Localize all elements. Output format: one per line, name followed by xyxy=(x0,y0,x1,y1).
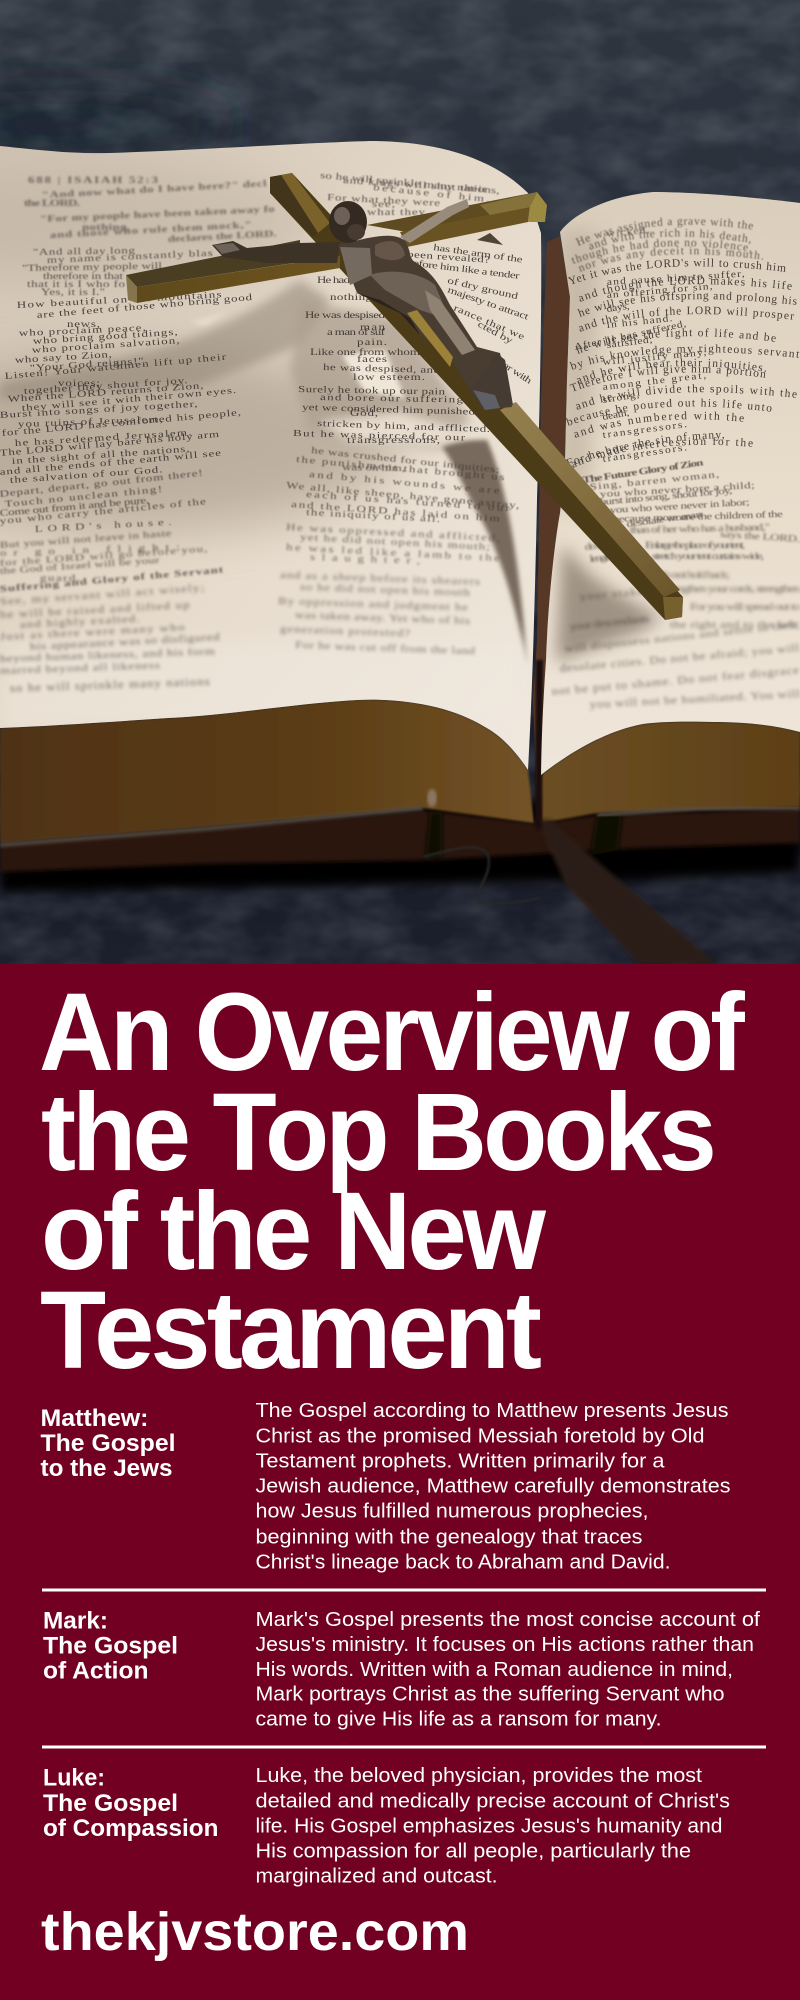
printed scripture text: left page, left column: so he will sprinkle many nations xyxy=(10,675,210,695)
printed scripture text: left page, left column: are the feet of those who bring good xyxy=(36,292,253,320)
printed scripture text: left page, left column: who say to Zion, xyxy=(15,350,112,365)
printed scripture text: left page, left column: who bring good tidings, xyxy=(33,327,178,346)
printed scripture text: left page, left column: that it is I who fo xyxy=(27,280,125,289)
printed scripture text: left page, right column: before him like a tender xyxy=(407,258,520,281)
printed scripture text: right page: among the great, xyxy=(602,370,707,393)
printed scripture text: left page, right column: He was oppressed and afflicted, xyxy=(286,522,500,544)
body text: Mark: Mark portrays Christ as the suffering Servant who xyxy=(256,1682,724,1706)
printed scripture text: left page, right column: yet he did not open his mouth; xyxy=(300,532,490,552)
printed scripture text: left page, right column: and as a sheep before its shearers xyxy=(280,569,481,588)
printed scripture text: right page: will dispossess nations and settle in their xyxy=(564,619,799,655)
body text: Matthew: Christ's lineage back to Abraham and David. xyxy=(256,1550,670,1574)
body text: Matthew xyxy=(256,1399,730,1574)
printed scripture text: left page, left column: and highly exalted. xyxy=(20,613,140,631)
printed scripture text: left page, right column: majesty to attract xyxy=(446,285,531,322)
printed scripture text: left page, left column: or go in flight; xyxy=(0,542,180,558)
body text: Mark: Jesus's ministry. It focuses on His actions rather than xyxy=(256,1633,754,1656)
printed scripture text: right page: For he bore the sin of many, xyxy=(566,432,724,464)
feet block xyxy=(470,353,513,410)
printed scripture text: left page, left column: beyond human likeness, and his form xyxy=(0,646,215,665)
printed scripture text: left page, right column: of dry ground xyxy=(446,276,519,302)
printed scripture text: left page, right column: God, xyxy=(350,409,378,418)
printed scripture text: right page: transgressors. xyxy=(602,442,688,465)
printed scripture text: right page: and he will divide the spoils with the xyxy=(576,384,797,410)
printed scripture text: left page, right column: low esteem. xyxy=(353,373,425,382)
printed scripture text: left page, left column: news, xyxy=(67,320,100,329)
printed scripture text: right page: will justify many, xyxy=(602,347,707,368)
printed scripture text: left page, right column: was on him, xyxy=(342,463,405,474)
gold gap between legs and beam xyxy=(407,310,453,367)
printed scripture text: left page, left column: "And all day long xyxy=(33,246,135,257)
printed scripture text: right page: The Future Glory of Zion xyxy=(582,458,705,485)
body text: Luke: life. His Gospel emphasizes Jesus's humanity and xyxy=(256,1814,722,1838)
printed scripture text: left page, left column: "Therefore my people will xyxy=(22,261,162,273)
printed scripture text: left page, right column: because of him. xyxy=(373,183,490,205)
printed scripture text: right page: your stakes xyxy=(579,585,650,603)
printed scripture text: left page, right column: the punishment that brought us xyxy=(296,455,505,483)
printed scripture text: right page: do not hold xyxy=(584,538,630,553)
printed scripture text: right page: he will see his offspring and prolong his xyxy=(577,292,796,317)
printed scripture text: right page xyxy=(550,217,800,712)
printed scripture text: left page, right column: so he did not open his mouth xyxy=(300,581,470,599)
section: Matthew xyxy=(40,1399,730,1574)
printed scripture text: left page, left column: in the sight of all the nations, xyxy=(11,444,190,466)
printed scripture text: left page, right column: jar with xyxy=(498,358,534,386)
body text: Mark xyxy=(256,1608,760,1730)
printed scripture text: left page, right column: He had xyxy=(317,276,350,285)
panel: maroon content background xyxy=(0,964,800,2000)
printed scripture text: left page, left column: Listen! Your watchmen lift up their xyxy=(4,352,227,381)
printed scripture text: right page: transgressors. xyxy=(602,419,688,441)
heading: Luke xyxy=(43,1764,218,1842)
printed scripture text: left page, right column: pain. xyxy=(357,338,387,347)
printed scripture text: left page, left column xyxy=(0,176,277,695)
printed scripture text: left page, left column: voices; xyxy=(58,379,100,388)
title: An Overview of xyxy=(39,971,745,1094)
printed scripture text: right page: and with the rich in his death, xyxy=(588,228,751,250)
printed scripture text: right page: you will not be humiliated. You will xyxy=(589,687,800,711)
photo: open Bible with crucifix xyxy=(0,0,800,964)
title: of the New xyxy=(41,1170,546,1293)
printed scripture text: left page, right column: he was led like a lamb to the xyxy=(286,542,500,564)
printed scripture text: left page, left column: marred beyond all likeness xyxy=(0,660,160,677)
left page xyxy=(0,141,541,770)
printed scripture text: left page, right column: nothing xyxy=(330,293,372,302)
body text: Matthew: how Jesus fulfilled numerous prophecies, xyxy=(256,1500,648,1522)
body text: Mark: Mark's Gospel presents the most concise account of xyxy=(256,1608,760,1631)
printed scripture text: right page: lengthen your xyxy=(589,549,640,565)
printed scripture text: left page, right column: For what they were xyxy=(327,193,440,208)
printed scripture text: right page: because he poured out his life unto xyxy=(566,398,772,426)
printed scripture text: left page, left column: Burst into songs of joy together, xyxy=(0,399,198,420)
printed scripture text: right page: than of her who has a husband," xyxy=(630,522,770,536)
printed scripture text: right page: and he will bear their iniquities. xyxy=(577,358,766,384)
printed scripture text: right page: Enlarge the place of your tent, xyxy=(645,540,745,551)
printed scripture text: left page, right column: and kings will shut their xyxy=(343,176,487,195)
body text: Luke: detailed and medically precise account of Christ's xyxy=(256,1790,730,1812)
heading: Matthew: The Gospel xyxy=(40,1430,176,1457)
head xyxy=(329,201,367,243)
printed scripture text: left page, right column: He was despised xyxy=(305,311,385,320)
body text: Mark: came to give His life as a ransom for many. xyxy=(256,1708,662,1730)
printed scripture text: right page: desolate woman xyxy=(626,510,703,529)
printed scripture text: left page, left column: When the LORD returns to Zion, xyxy=(7,381,204,404)
printed scripture text: right page: desolate cities. Do not be afraid; you will xyxy=(559,641,800,675)
body xyxy=(338,236,512,410)
figure of Christ xyxy=(212,199,513,410)
printed scripture text: left page, left column: for the LORD will go before you, xyxy=(0,544,208,568)
printed scripture text: right page: and cause him to suffer, xyxy=(606,268,745,288)
printed scripture text: left page, right column: been revealed? xyxy=(407,250,490,265)
heading: Mark: The Gospel xyxy=(43,1632,178,1660)
cross: vertical beam xyxy=(270,173,683,620)
body text: Luke: His compassion for all people, particularly the xyxy=(256,1840,691,1862)
printed scripture text: left page, left column: 688 | ISAIAH 52:3 xyxy=(28,176,158,185)
printed scripture text: left page, right column: so he will sprinkle many nations, xyxy=(320,171,500,196)
footer website: thekjvstore.com xyxy=(41,1902,469,1962)
printed scripture text: left page, left column: Come out from it and be pure, xyxy=(0,496,150,518)
body text: Luke xyxy=(256,1764,730,1888)
cross shadow wedge on page xyxy=(477,233,503,245)
printed scripture text: right page: and though the LORD makes his life xyxy=(579,276,792,302)
printed scripture text: right page: you who never bore a child; xyxy=(600,481,755,499)
printed scripture text: left page, right column: generation protested? xyxy=(280,623,410,639)
printed scripture text: left page, left column: who proclaim peace, xyxy=(19,323,146,338)
printed scripture text: left page, right column: what they xyxy=(367,208,425,217)
printed scripture text: left page, right column: For he was cut off from the land xyxy=(295,639,475,657)
printed scripture text: right page: and made intercession for the xyxy=(572,437,753,468)
printed scripture text: left page, left column: he has redeemed Jerusalem. xyxy=(15,428,192,448)
printed scripture text: left page, right column: and the LORD has laid on him xyxy=(291,500,500,524)
printed scripture text: left page, right column: We all, like sheep, have gone astray, xyxy=(286,481,520,511)
section: Luke xyxy=(43,1764,730,1888)
printed scripture text: left page, right column: But he was pierced for our xyxy=(293,429,465,443)
printed scripture text: right page: not be put to shame. Do not fear disgrace xyxy=(551,663,799,698)
section: Mark xyxy=(43,1608,760,1730)
printed scripture text: right page: by his knowledge my righteous servant xyxy=(569,344,800,370)
printed scripture text: right page: satisfied; xyxy=(606,334,653,351)
body text: Luke: marginalized and outcast. xyxy=(256,1864,498,1888)
printed scripture text: left page, right column: each of us has turned to our xyxy=(306,490,510,514)
printed scripture text: left page, right column: stricken by him, and afflicted. xyxy=(317,419,490,435)
printed scripture text: left page, left column: therefore in that xyxy=(43,272,124,281)
heading: Matthew: to the Jews xyxy=(40,1455,172,1482)
heading: Luke: Luke: xyxy=(43,1764,105,1792)
printed scripture text: left page, left column: they will see it with their own eyes. xyxy=(21,386,237,413)
printed scripture text: left page, left column: together they shout for joy. xyxy=(24,376,188,396)
printed scripture text: right page: he will see the light of life and be xyxy=(575,328,776,354)
printed scripture text: right page: lengthen your cords, strengthen xyxy=(670,583,800,595)
printed scripture text: right page: Yet it was the LORD's will to crush him xyxy=(568,258,786,284)
heading: Luke: of Compassion xyxy=(43,1815,218,1842)
printed scripture text: right page: Sing, barren woman, xyxy=(589,470,720,492)
body text: Matthew: Christ as the promised Messiah foretold by Old xyxy=(256,1424,704,1448)
body text: Mark: His words. Written with a Roman audience in mind, xyxy=(256,1658,733,1681)
heading: Mark: of Action xyxy=(43,1658,148,1684)
heading: Mark xyxy=(43,1608,178,1684)
printed scripture text: right page: stretch your tent curtains wide, xyxy=(652,551,764,562)
body text: Luke: Luke, the beloved physician, provides the most xyxy=(256,1764,702,1787)
printed scripture text: left page, left column: his appearance was so disfigured xyxy=(30,631,220,653)
printed scripture text: left page, left column: my name is constantly blas xyxy=(47,248,213,265)
printed scripture text: right page: For you will spread out to xyxy=(690,601,800,613)
printed scripture text: right page: though he had done no violence, xyxy=(571,238,752,264)
heading: Mark: Mark: xyxy=(43,1608,108,1634)
title: the Top Books xyxy=(41,1071,713,1194)
printed scripture text: right page: death, xyxy=(602,407,630,423)
printed scripture text: right page: an offering for sin, xyxy=(606,281,713,301)
printed scripture text: left page, right column: rance that we xyxy=(452,303,526,342)
page block: gilded edges xyxy=(0,700,800,845)
printed scripture text: left page, right column: the iniquity of us all. xyxy=(306,508,440,524)
printed scripture text: left page, right column: was taken away. Yet who of his xyxy=(295,609,471,627)
printed scripture text: left page, left column: the salvation of our God. xyxy=(9,465,163,485)
printed scripture text: left page, left column: you who carry the articles of the xyxy=(0,497,206,526)
printed scripture text: left page, right column: slaughter, xyxy=(310,552,420,566)
printed scripture text: right page: Therefore I will give him a portion xyxy=(570,364,766,392)
heading: Matthew: Matthew: xyxy=(40,1405,148,1432)
printed scripture text: left page, left column: you ruins of Jerusalem, xyxy=(18,415,163,429)
printed scripture text: left page, left column: Yes, it is I." xyxy=(41,288,105,297)
printed scripture text: left page, left column: See, my servant will act wisely; xyxy=(0,582,205,608)
printed scripture text: right page: wicked, xyxy=(606,224,650,240)
left arm and hand xyxy=(212,241,340,263)
printed scripture text: left page, right column: has the arm of the xyxy=(433,243,523,265)
printed scripture text: right page: the right and to the left; xyxy=(670,619,800,631)
printed scripture text: left page, right column: yet we considered him punished xyxy=(302,403,476,417)
printed scripture text: left page, right column: Surely he took up our pain xyxy=(298,385,446,397)
printed scripture text: right page: in his hand. xyxy=(606,313,673,331)
printed scripture text: left page, left column: Just as there were many who xyxy=(0,621,185,643)
printed scripture text: left page, left column: How beautiful on the mountains xyxy=(17,290,222,310)
printed scripture text: right page: nor was any deceit in his mouth. xyxy=(578,246,764,272)
heading: Luke: The Gospel xyxy=(43,1790,178,1817)
printed scripture text: left page, left column: LORD's house. xyxy=(35,517,172,534)
printed scripture text: left page, left column: the LORD. xyxy=(24,199,80,208)
printed scripture text: left page, left column: But you will not leave in haste xyxy=(0,529,172,550)
heading: Matthew xyxy=(40,1405,176,1482)
printed scripture text: left page, right column: cted by xyxy=(476,319,514,346)
ribbon marker and spine xyxy=(533,236,716,964)
printed scripture text: right page: He was assigned a grave with the xyxy=(575,217,754,246)
printed scripture text: left page, right column: and by his wounds we are xyxy=(309,470,500,496)
printed scripture text: right page: because more are the children of the xyxy=(613,510,783,524)
body text: Matthew: Testament prophets. Written primarily for a xyxy=(256,1450,665,1472)
printed scripture text: left page, right column: he was crushed for our iniquities; xyxy=(311,446,500,475)
printed scripture text: left page, right column: transgressions, xyxy=(347,436,440,445)
printed scripture text: left page, left column: who proclaim salvation, xyxy=(32,336,180,355)
printed scripture text: right page: burst into song, shout for joy, xyxy=(599,486,733,507)
title xyxy=(39,971,745,1392)
printed scripture text: right page: says the LORD. xyxy=(720,529,800,545)
printed scripture text: right page: your descendants xyxy=(569,613,650,633)
printed scripture text: right page: and the will of the LORD will prosper xyxy=(579,306,794,332)
printed scripture text: left page, right column: By oppression and judgment he xyxy=(278,595,468,613)
body text: Matthew: The Gospel according to Matthew presents Jesus xyxy=(256,1399,728,1422)
body text: Matthew: Jewish audience, Matthew carefully demonstrates xyxy=(256,1474,730,1498)
printed scripture text: left page, right column: see, xyxy=(372,200,395,209)
book cover and binding xyxy=(0,800,800,904)
cross: horizontal beam xyxy=(126,192,547,303)
photo background: dark slate surface xyxy=(0,0,800,964)
printed scripture text: right page: After he has suffered, xyxy=(573,318,687,353)
printed scripture text: left page, left column: "For my people have been taken away fo xyxy=(40,204,275,224)
printed scripture text: left page, left column: The LORD will lay bare his holy arm xyxy=(0,429,220,458)
printed scripture text: right page: do not hold back; xyxy=(660,569,730,581)
printed scripture text: left page, left column: and all the ends of the earth will see xyxy=(0,448,221,477)
printed scripture text: right page: strong, xyxy=(602,389,640,406)
printed scripture text: left page, right column xyxy=(278,171,534,657)
printed scripture text: left page, left column: "And now what do I have here?" decl xyxy=(42,179,267,200)
right arm and hand xyxy=(400,199,469,243)
printed scripture text: left page, right column: a man of suf xyxy=(327,328,385,337)
printed scripture text: left page, left column: he will be raised and lifted up xyxy=(0,599,190,621)
body text: Matthew: beginning with the genealogy that traces xyxy=(256,1526,642,1548)
printed scripture text: left page, left column: Depart, depart, go out from there! xyxy=(0,468,203,499)
printed scripture text: left page, left column: nothing, xyxy=(82,223,130,232)
printed scripture text: right page: days, xyxy=(606,301,630,315)
right page xyxy=(541,192,800,775)
printed scripture text: left page, left column: for the LORD has comforted his people, xyxy=(1,408,241,438)
printed scripture text: left page, left column: Suffering and Glory of the Servant xyxy=(0,565,224,594)
printed scripture text: left page, right column: Like one from whom xyxy=(310,348,420,357)
printed scripture text: left page, right column: man xyxy=(360,323,385,332)
printed scripture text: left page, right column: he was despised, and xyxy=(323,363,441,376)
printed scripture text: left page, left column: and those who rule them mock," xyxy=(50,220,252,240)
printed scripture text: left page, left column: declares the LORD. xyxy=(168,229,277,244)
printed scripture text: left page, left column: guard. xyxy=(40,574,80,583)
printed scripture text: right page: you who were never in labor; xyxy=(610,498,750,515)
printed scripture text: right page: and was numbered with the xyxy=(574,411,744,438)
title: Testament xyxy=(40,1269,541,1392)
printed scripture text: left page, right column: faces xyxy=(357,355,387,364)
printed scripture text: left page, left column: Touch no unclean thing! xyxy=(4,484,163,509)
printed scripture text: left page, left column: the God of Israel will be your xyxy=(0,555,160,576)
printed scripture text: left page, right column: and bore our suffering xyxy=(320,393,464,405)
crucifix xyxy=(126,173,683,620)
printed scripture text: left page, left column: "Your God reigns!" xyxy=(30,356,144,373)
